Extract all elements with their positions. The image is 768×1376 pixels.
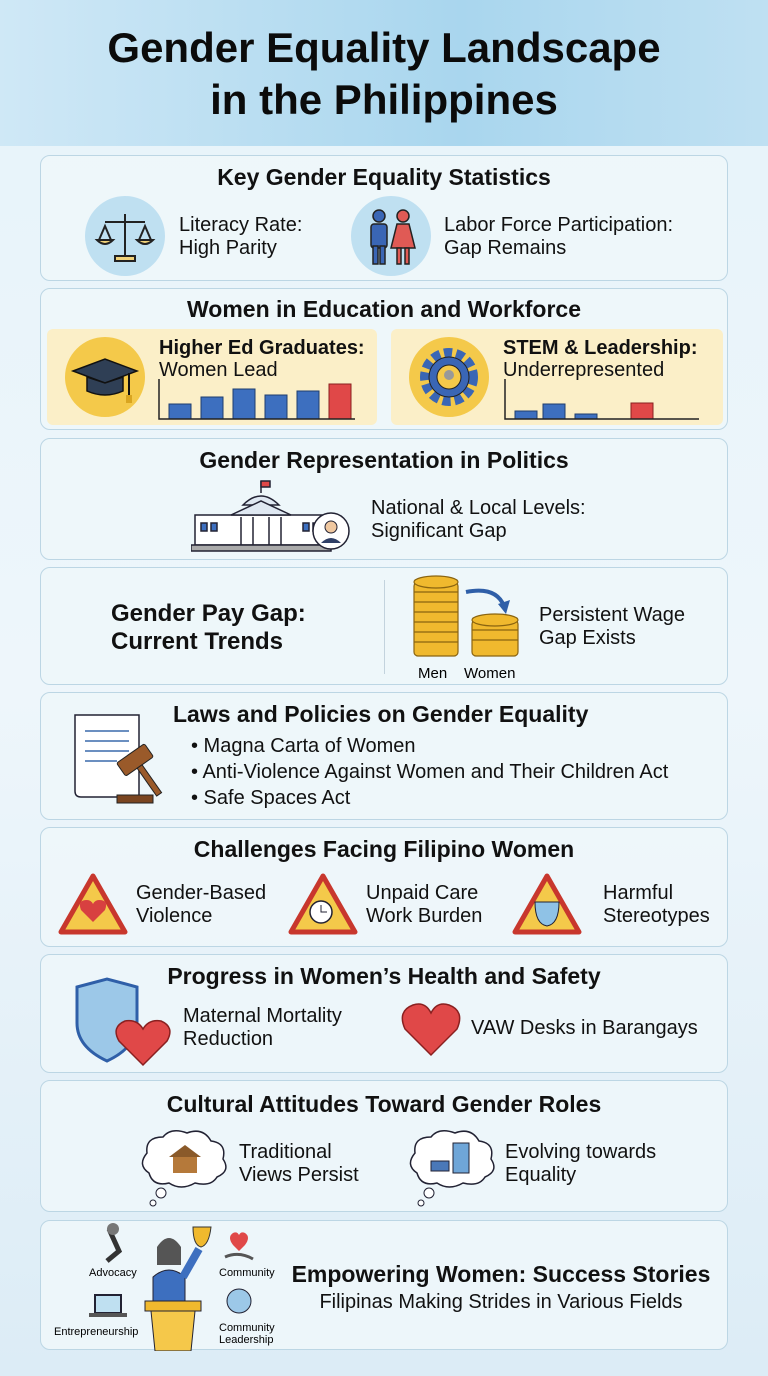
panel: education and workforce [40,288,728,430]
text: Maternal Mortality [183,1005,342,1027]
text: Persistent Wage [539,604,685,626]
heading: Current Trends [111,628,283,655]
text: Gender-Based [136,882,266,904]
list: • Safe Spaces Act [191,787,350,809]
title: Gender Equality Landscape [107,24,661,71]
illustration: woman at podium with icons: Community [219,1322,275,1334]
illustration: woman at podium with icons [54,1223,275,1351]
icon: thought bubble house [142,1130,227,1206]
panel: success stories [40,1220,728,1350]
icon: grad cap [65,337,145,417]
illustration: woman at podium with icons: Entrepreneurship [54,1326,138,1338]
text: Underrepresented [503,359,664,381]
heading: Gender Representation in Politics [199,447,569,473]
text [505,1141,656,1186]
text: literacy [179,214,302,259]
text [603,882,710,927]
bar chart [158,379,355,420]
text [371,497,586,542]
text: Harmful [603,882,673,904]
text: Gap Exists [539,627,636,649]
text: labor force: Labor Force Participation: [444,214,673,236]
text: National & Local Levels: [371,497,586,519]
text: Unpaid Care [366,882,478,904]
heading: Key Gender Equality Statistics [217,164,551,190]
panel: challenges [40,827,728,947]
text: Violence [136,905,212,927]
heading: Progress in Women’s Health and Safety [167,963,601,989]
icon: scroll and gavel [74,714,162,804]
subtitle: Filipinas Making Strides in Various Fields [319,1291,683,1313]
text: Higher Ed Graduates: [159,337,365,359]
icon: thought bubble office [410,1130,495,1206]
text: Evolving towards [505,1141,656,1163]
icon: heart [402,1003,460,1056]
bar chart [504,379,699,420]
icon: government building [191,480,350,552]
text: Views Persist [239,1164,359,1186]
title: in the Philippines [210,76,558,123]
text [366,882,482,927]
list: • Magna Carta of Women [191,735,416,757]
list [191,735,668,809]
icon: warning mask [512,874,582,934]
panel: health and safety [40,954,728,1073]
text [503,337,697,381]
text: STEM & Leadership: [503,337,697,359]
text: VAW Desks in Barangays [471,1017,698,1039]
illustration: woman at podium with icons: Advocacy [89,1267,137,1279]
text [539,604,685,649]
heading: Challenges Facing Filipino Women [194,836,574,862]
icon: warning clock [288,874,358,934]
heading [111,600,306,655]
text [239,1141,359,1186]
text: Equality [505,1164,576,1186]
icon: scales [85,196,165,276]
icon: gear [409,337,489,417]
text: Work Burden [366,905,482,927]
heading: Laws and Policies on Gender Equality [173,701,588,727]
text: labor force [444,214,673,259]
icon: warning broken heart [58,874,128,934]
panel: pay gap [40,567,728,685]
text: literacy: Literacy Rate: [179,214,302,236]
illustration: woman at podium with icons: Community [219,1267,275,1279]
text: literacy: High Parity [179,237,277,259]
icon: coin stacks: Men [418,665,447,682]
heading: Women in Education and Workforce [187,296,581,322]
title [107,24,661,123]
text [183,1005,342,1050]
text: Traditional [239,1141,332,1163]
icon: man and woman [351,196,431,276]
panel: politics [40,438,728,560]
text: Stereotypes [603,905,710,927]
text [159,337,365,381]
text [136,882,266,927]
list: • Anti-Violence Against Women and Their Children Act [191,761,668,783]
text: Significant Gap [371,520,507,542]
text: Women Lead [159,359,278,381]
icon: coin stacks [413,575,519,682]
illustration: woman at podium with icons: Leadership [219,1334,273,1346]
sub-panel: STEM [391,329,723,425]
heading: Empowering Women: Success Stories [292,1261,710,1287]
panel: cultural attitudes [40,1080,728,1212]
heading: Gender Pay Gap: [111,600,306,627]
icon: shield and heart [76,978,171,1066]
text: labor force: Gap Remains [444,237,566,259]
panel: key statistics [40,155,728,281]
icon: coin stacks: Women [464,665,515,682]
header background [0,0,768,146]
text: Reduction [183,1028,273,1050]
heading: Cultural Attitudes Toward Gender Roles [167,1091,601,1117]
sub-panel: higher ed [47,329,377,425]
panel: laws [40,692,728,820]
